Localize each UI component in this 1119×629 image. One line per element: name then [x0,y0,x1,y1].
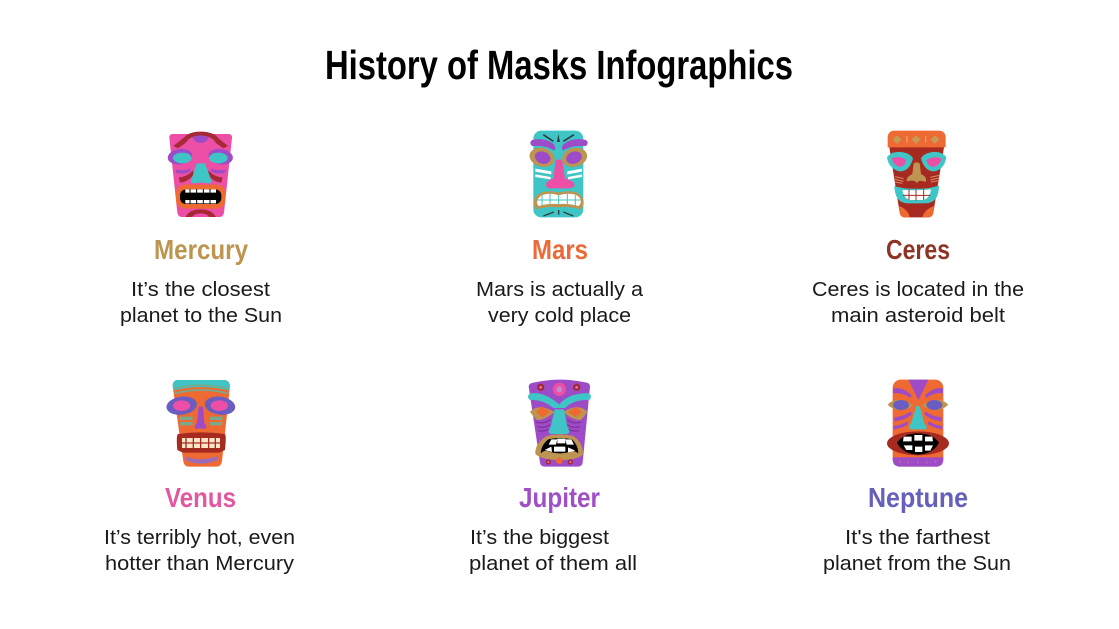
text: Ceres description: main asteroid belt [831,304,1005,327]
text: Neptune description: planet from the Sun [823,552,1011,575]
icon: Mars mask [527,131,589,217]
text: Neptune description [823,526,1011,575]
heading: Mars: Mars [532,234,588,265]
text: Venus description [104,526,295,575]
text: Jupiter description [469,526,637,575]
heading: Jupiter: Jupiter [519,482,600,513]
heading: Venus: Venus [165,482,236,513]
panel: Ceres [812,131,1024,327]
heading: Mercury: Mercury [154,234,248,265]
text: Neptune description: It's the farthest [845,526,990,549]
text: Mercury description: planet to the Sun [120,304,282,327]
panel: Venus [104,380,295,575]
heading: Ceres: Ceres [886,234,950,265]
panel: Neptune [823,380,1011,575]
text: Jupiter description: It’s the biggest [470,526,609,549]
icon: Ceres mask [887,131,946,217]
text: Ceres description: Ceres is located in the [812,278,1024,301]
text: Jupiter description: planet of them all [469,552,637,575]
panel: Mars [476,131,644,327]
panel: Mercury [120,132,282,327]
text: Mercury description [120,278,282,327]
text: Mars description [476,278,644,327]
text: Mercury description: It’s the closest [131,278,270,301]
text: Mars description: Mars is actually a [476,278,644,301]
icon: Venus mask [165,380,236,467]
text: Mars description: very cold place [488,304,631,327]
icon: Neptune mask [887,380,949,467]
heading: Neptune: Neptune [868,482,968,513]
text: Venus description: It’s terribly hot, even [104,526,295,549]
icon: Mercury mask [167,132,234,217]
icon: Jupiter mask [528,380,591,467]
title: History of Masks Infographics [325,42,793,88]
panel: Jupiter [469,380,637,575]
text: Venus description: hotter than Mercury [105,552,295,575]
text: Ceres description [812,278,1024,327]
